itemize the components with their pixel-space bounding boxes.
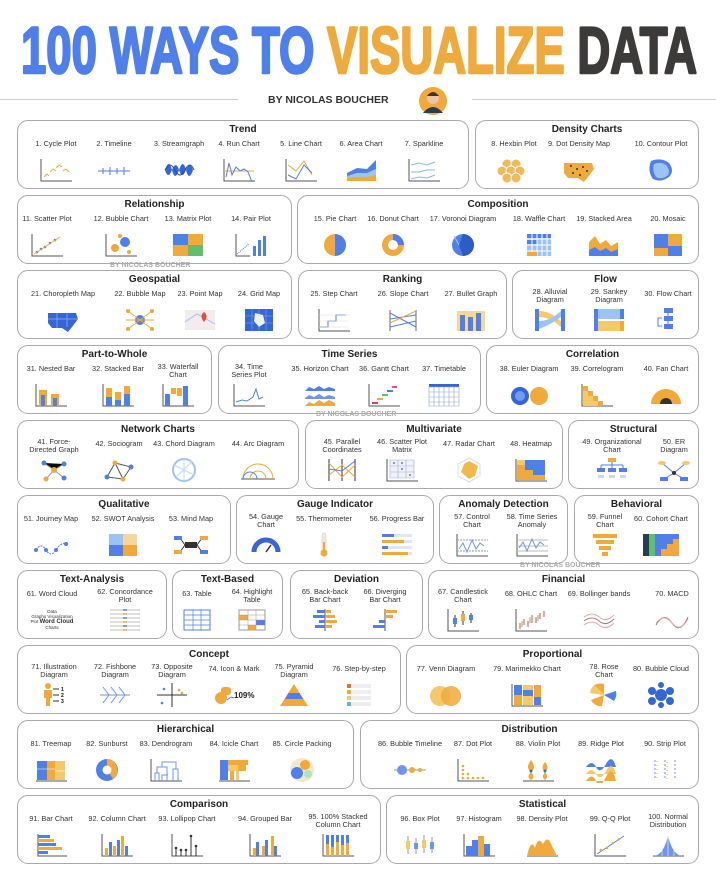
item: Normal Distribution: [631, 813, 705, 858]
item: Euler Diagram: 38. Euler Diagram: [500, 364, 558, 373]
panel: Multivariate: [305, 420, 563, 489]
panel: Statistical: [386, 795, 699, 864]
item: Line Chart: [280, 139, 322, 182]
item: Word Cloud: [15, 588, 89, 630]
item: Venn Diagram: [409, 663, 483, 708]
item: Dendrogram: 83. Dendrogram: [140, 739, 192, 748]
item: Lollipop Chart: 93. Lollipop Chart: [158, 814, 216, 823]
item: Control Chart: Chart: [463, 520, 481, 529]
heading: Distribution: Distribution: [501, 724, 558, 735]
panel: Geospatial: [17, 270, 292, 339]
item: Concordance Plot: 62. Concordance: [97, 587, 153, 596]
item: Parallel Coordinates: [305, 438, 379, 483]
item: Timetable: [422, 364, 466, 406]
panel: Structural: [568, 420, 699, 489]
item: Line Chart: 5. Line Chart: [280, 139, 322, 148]
heading: Text-Based: Text-Based: [201, 574, 254, 585]
item: Voronoi Diagram: 17. Voronoi Diagram: [430, 214, 496, 223]
item: Point Map: 23. Point Map: [177, 289, 223, 298]
item: Time Series Anomaly: [495, 513, 569, 558]
item: Point Map: [177, 289, 223, 330]
panel: Anomaly Detection: [439, 495, 568, 564]
item: Bubble Timeline: 86. Bubble Timeline: [378, 739, 442, 748]
item: Alluvial Diagram: Diagram: [536, 295, 564, 304]
item: Chord Diagram: [147, 438, 221, 483]
item: Gauge Chart: Chart: [257, 520, 275, 529]
item: Sankey Diagram: [591, 287, 628, 331]
item: Grid Map: [238, 289, 280, 331]
item: Choropleth Map: [31, 289, 95, 332]
item: Step Chart: 25. Step Chart: [310, 289, 358, 298]
item: SWOT Analysis: [86, 513, 160, 558]
item: Grouped Bar: [228, 813, 302, 858]
item: Venn Diagram: 77. Venn Diagram: [417, 664, 475, 673]
panel: Distribution: [360, 720, 699, 789]
item: OHLC Chart: 68. OHLC Chart: [505, 589, 557, 598]
item: Stacked Bar: [92, 364, 144, 406]
item: Candlestick Chart: 67. Candlestick: [438, 587, 488, 596]
item: Gantt Chart: 36. Gantt Chart: [359, 364, 409, 373]
item: Pie Chart: 15. Pie Chart: [314, 214, 356, 223]
panel: Concept: [17, 645, 401, 714]
heading: Proportional: Proportional: [523, 649, 582, 660]
panel: Part-to-Whole: [17, 345, 212, 414]
item: Lollipop Chart: [150, 813, 224, 858]
item: Circle Packing: [265, 738, 339, 783]
item: Dendrogram: [129, 738, 203, 783]
item: MACD: 70. MACD: [655, 589, 689, 598]
item: Histogram: [442, 813, 516, 858]
heading: Multivariate: Multivariate: [406, 424, 462, 435]
item: Pyramid Diagram: Diagram: [280, 670, 308, 679]
item: Timeline: 2. Timeline: [96, 139, 132, 148]
item: Q-Q Plot: [573, 813, 647, 858]
heading: Deviation: Deviation: [334, 574, 379, 585]
panel: Flow: [512, 270, 699, 339]
item: Waffle Chart: [513, 214, 566, 256]
panel: Behavioral: [574, 495, 699, 564]
panel: Proportional: [406, 645, 699, 714]
item: Back-back Bar Chart: 65. Back-back: [302, 587, 348, 596]
item: SWOT Analysis: 52. SWOT Analysis: [92, 514, 154, 523]
panel: Network Charts: [17, 420, 299, 489]
item: Voronoi Diagram: [430, 214, 496, 256]
item: Bubble Chart: 12. Bubble Chart: [94, 214, 148, 223]
item: Timetable: 37. Timetable: [422, 364, 466, 373]
heading: Comparison: Comparison: [170, 799, 228, 810]
watermark: BY NICOLAS BOUCHER: [110, 262, 190, 269]
heading: Ranking: Ranking: [383, 274, 422, 285]
item: Mind Map: [154, 513, 228, 558]
item: Sparkline: [405, 139, 443, 182]
item: Fishbone Diagram: [78, 663, 152, 708]
item: Sparkline: 7. Sparkline: [405, 139, 443, 148]
item: Waffle Chart: 18. Waffle Chart: [513, 214, 565, 223]
byline: [0, 87, 716, 115]
item: Concordance Plot: Plot: [119, 595, 131, 604]
item: Force-Directed Graph: [17, 438, 91, 483]
item: Flow Chart: 30. Flow Chart: [644, 289, 692, 298]
item: Icon & Mark: 74. Icon & Mark: [208, 664, 260, 673]
item: Opposite Diagram: [135, 663, 209, 708]
item: Organizational Chart: [575, 438, 649, 483]
item: Progress Bar: 56. Progress Bar: [370, 514, 424, 523]
item: Table: 63. Table: [182, 589, 212, 598]
item: Horizon Chart: 35. Horizon Chart: [291, 364, 349, 373]
item: Dot Plot: 87. Dot Plot: [454, 739, 492, 748]
item: Radar Chart: [432, 438, 506, 483]
item: Highlight Table: 64. Highlight: [232, 587, 272, 596]
item: Cycle Plot: [36, 139, 76, 182]
item: Mosaic: [650, 214, 686, 256]
item: Q-Q Plot: 99. Q-Q Plot: [590, 814, 630, 823]
item: Normal Distribution: Distribution: [650, 820, 686, 829]
item: Pair Plot: [231, 214, 271, 256]
item: Funnel Chart: [568, 513, 642, 558]
item: Mosaic: 20. Mosaic: [650, 214, 686, 223]
item: Bollinger bands: 69. Bollinger bands: [568, 589, 630, 598]
item: Control Chart: 57. Control: [454, 512, 490, 521]
item: Pie Chart: [314, 214, 356, 256]
heading: Text-Analysis: Text-Analysis: [60, 574, 124, 585]
heading: Time Series: Time Series: [322, 349, 377, 360]
item: Fan Chart: [629, 363, 703, 408]
item: Box Plot: [383, 813, 457, 858]
item: Time Series Anomaly: 58. Time Series: [507, 512, 557, 521]
item: Time Series Plot: [231, 362, 267, 406]
panel: Ranking: [298, 270, 507, 339]
item: Column Chart: [80, 813, 154, 858]
item: Icicle Chart: 84. Icicle Chart: [210, 739, 258, 748]
heading: Composition: Composition: [467, 199, 529, 210]
item: Diverging Bar Chart: 66. Diverging: [364, 587, 406, 596]
item: Back-back Bar Chart: [288, 588, 362, 633]
item: Candlestick Chart: [426, 588, 500, 633]
item: Strip Plot: 90. Strip Plot: [644, 739, 686, 748]
item: Parallel Coordinates: 45. Parallel: [324, 437, 360, 446]
item: Run Chart: [218, 139, 260, 182]
item: Step-by-step: [322, 663, 396, 708]
item: Sankey Diagram: 29. Sankey: [591, 287, 627, 296]
item: Nested Bar: [26, 364, 76, 406]
heading: Concept: Concept: [189, 649, 229, 660]
item: Grouped Bar: 94. Grouped Bar: [238, 814, 292, 823]
item: Donut Chart: [367, 214, 419, 256]
item: Fishbone Diagram: 72. Fishbone: [94, 662, 136, 671]
item: Funnel Chart: Chart: [596, 520, 614, 529]
item: Thermometer: [287, 513, 361, 558]
item: Matrix Plot: 13. Matrix Plot: [165, 214, 211, 223]
heading: Structural: Structural: [610, 424, 657, 435]
item: Column Chart: 92. Column Chart: [88, 814, 146, 823]
panel: Hierarchical: [17, 720, 354, 789]
item: Stacked Area: [576, 214, 632, 256]
panel: Financial: [428, 570, 699, 639]
item: Violin Plot: 88. Violin Plot: [516, 739, 560, 748]
item: ER Diagram: Diagram: [660, 445, 688, 454]
item: Rose Chart: Chart: [595, 670, 613, 679]
item: Journey Map: 51. Journey Map: [24, 514, 78, 523]
item: Sunburst: 82. Sunburst: [86, 739, 128, 748]
item: Concordance Plot: [88, 588, 162, 633]
item: 100% Stacked Column Chart: Column Chart: [315, 820, 360, 829]
item: Pair Plot: 14. Pair Plot: [231, 214, 271, 223]
item: Contour Plot: 10. Contour Plot: [635, 139, 687, 148]
item: Word Cloud: Plot Word Cloud: [31, 619, 73, 625]
item: Time Series Plot: Series Plot: [231, 370, 267, 379]
panel: Deviation: [290, 570, 423, 639]
item: Illustration Diagram: 71. Illustration: [31, 662, 77, 671]
item: Word Cloud: Charts: [45, 625, 59, 630]
heading: Gauge Indicator: Gauge Indicator: [297, 499, 373, 510]
item: Illustration Diagram: 2: [61, 693, 64, 699]
item: Flow Chart: [644, 289, 692, 329]
item: Bubble Map: [114, 289, 166, 331]
item: Bubble Timeline: [373, 738, 447, 783]
item: Strip Plot: [628, 738, 702, 783]
item: MACD: [635, 588, 709, 633]
item: Organizational Chart: Chart: [603, 445, 621, 454]
item: Rose Chart: 78. Rose: [589, 662, 619, 671]
item: Circle Packing: 85. Circle Packing: [273, 739, 331, 748]
item: Mind Map: 53. Mind Map: [169, 514, 213, 523]
item: Opposite Diagram: Diagram: [158, 670, 186, 679]
heading: Anomaly Detection: Anomaly Detection: [458, 499, 549, 510]
item: Dot Density Map: 9. Dot Density Map: [548, 139, 610, 148]
item: Bullet Graph: 27. Bullet Graph: [445, 289, 497, 298]
item: Density Plot: 98. Density Plot: [516, 814, 568, 823]
heading: Statistical: Statistical: [519, 799, 566, 810]
panel: Density Charts: [475, 120, 699, 189]
item: Treemap: 81. Treemap: [31, 739, 71, 748]
item: Bollinger bands: [562, 588, 636, 633]
item: Icon & Mark: [197, 663, 271, 708]
item: Waterfall Chart: [158, 362, 198, 406]
watermark: BY NICOLAS BOUCHER: [520, 562, 600, 569]
heading: Flow: Flow: [594, 274, 617, 285]
item: Nested Bar: 31. Nested Bar: [27, 364, 75, 373]
item: Stacked Area: 19. Stacked Area: [576, 214, 632, 223]
item: Marimekko Chart: [490, 663, 564, 708]
item: Contour Plot: [635, 139, 688, 181]
heading: Behavioral: Behavioral: [611, 499, 662, 510]
item: Bubble Cloud: [624, 663, 698, 708]
item: Cohort Chart: 60. Cohort Chart: [634, 514, 688, 523]
item: Diverging Bar Chart: Bar Chart: [369, 595, 401, 604]
item: Illustration Diagram: Diagram: [40, 670, 68, 679]
item: Correlogram: 39. Correlogram: [571, 364, 623, 373]
item: Fishbone Diagram: Diagram: [101, 670, 129, 679]
item: Scatter Plot Matrix: Matrix: [392, 445, 412, 454]
item: Highlight Table: Table: [243, 595, 261, 604]
item: 100% Stacked Column Chart: [301, 813, 375, 858]
item: Alluvial Diagram: [532, 287, 567, 331]
item: Waterfall Chart: 33. Waterfall: [158, 362, 198, 371]
item: Bar Chart: [14, 813, 88, 858]
item: Arc Diagram: 44. Arc Diagram: [232, 439, 284, 448]
item: Donut Chart: 16. Donut Chart: [367, 214, 419, 223]
item: Hexbin Plot: [491, 139, 537, 182]
item: Dot Density Map: [548, 139, 610, 182]
item: Icicle Chart: [197, 738, 271, 783]
item: Gauge Chart: 54. Gauge: [249, 512, 283, 521]
item: Pyramid Diagram: [257, 663, 331, 708]
item: Cohort Chart: [624, 513, 698, 558]
item: Scatter Plot: 11. Scatter Plot: [22, 214, 72, 223]
item: Scatter Plot: [22, 214, 72, 256]
item: Euler Diagram: [500, 364, 558, 405]
item: Bar Chart: 91. Bar Chart: [29, 814, 73, 823]
item: Area Chart: 6. Area Chart: [340, 139, 382, 148]
item: Step Chart: [310, 289, 358, 332]
item: Funnel Chart: 59. Funnel: [588, 512, 622, 521]
item: Organizational Chart: 49. Organizational: [582, 437, 642, 446]
item: Sociogram: 42. Sociogram: [95, 439, 143, 448]
item: Control Chart: [435, 513, 509, 558]
heading: Geospatial: Geospatial: [129, 274, 180, 285]
item: Thermometer: 55. Thermometer: [296, 514, 352, 523]
item: Ridge Plot: 89. Ridge Plot: [578, 739, 624, 748]
item: Bubble Cloud: 80. Bubble Cloud: [633, 664, 689, 673]
heading: Financial: Financial: [542, 574, 585, 585]
item: Hexbin Plot: 8. Hexbin Plot: [491, 139, 537, 148]
byline: BY NICOLAS BOUCHER: [268, 94, 389, 106]
item: Heatmap: [494, 438, 568, 483]
item: Highlight Table: [215, 588, 289, 633]
item: 100% Stacked Column Chart: 95. 100% Stacked: [308, 812, 368, 821]
heading: Correlation: Correlation: [566, 349, 619, 360]
panel: Comparison: [17, 795, 381, 864]
item: Arc Diagram: [221, 438, 295, 483]
item: Stacked Bar: 32. Stacked Bar: [92, 364, 144, 373]
item: Illustration Diagram: 1: [61, 687, 64, 693]
item: Streamgraph: [154, 139, 204, 176]
item: Gantt Chart: [359, 364, 409, 406]
item: Word Cloud: Graphs Visualization: [31, 614, 73, 619]
item: Choropleth Map: 21. Choropleth Map: [31, 289, 95, 298]
item: Fan Chart: 40. Fan Chart: [644, 364, 688, 373]
item: Table: [160, 588, 234, 633]
panel: Composition: [297, 195, 699, 264]
item: Illustration Diagram: 3: [61, 699, 64, 705]
heading: Relationship: Relationship: [124, 199, 184, 210]
heading: Hierarchical: Hierarchical: [157, 724, 214, 735]
item: Violin Plot: [501, 738, 575, 783]
item: Radar Chart: 47. Radar Chart: [443, 439, 495, 448]
item: Bubble Chart: [94, 214, 148, 256]
item: Alluvial Diagram: 28. Alluvial: [533, 287, 567, 296]
item: Slope Chart: 26. Slope Chart: [378, 289, 428, 298]
item: Force-Directed Graph: 41. Force-: [37, 437, 71, 446]
panel: Correlation: [486, 345, 699, 414]
panel: Gauge Indicator: [236, 495, 434, 564]
item: Treemap: [14, 738, 88, 783]
item: Opposite Diagram: 73. Opposite: [151, 662, 193, 671]
item: Matrix Plot: [165, 214, 212, 256]
panel: Text-Based: [172, 570, 283, 639]
item: Word Cloud: Data: [47, 609, 57, 614]
item: Histogram: 97. Histogram: [456, 814, 502, 823]
item: Bubble Map: 22. Bubble Map: [114, 289, 166, 298]
item: Gauge Chart: [229, 513, 303, 558]
item: Ridge Plot: [564, 738, 638, 783]
item: Sankey Diagram: Diagram: [595, 295, 623, 304]
item: Scatter Plot Matrix: [365, 438, 439, 483]
item: Diverging Bar Chart: [348, 588, 422, 633]
item: ER Diagram: [637, 438, 711, 483]
item: Parallel Coordinates: Coordinates: [322, 445, 362, 454]
item: Slope Chart: [378, 289, 428, 331]
panel: Trend: [17, 120, 469, 189]
item: Area Chart: [340, 139, 382, 181]
panel: Text-Analysis: [17, 570, 167, 639]
item: Run Chart: 4. Run Chart: [218, 139, 260, 148]
heading: Trend: Trend: [229, 124, 257, 135]
item: Streamgraph: 3. Streamgraph: [154, 139, 204, 148]
item: Rose Chart: [567, 663, 641, 708]
item: Dot Plot: [436, 738, 510, 783]
item: OHLC Chart: [494, 588, 568, 633]
item: ER Diagram: 50. ER: [663, 437, 685, 446]
item: Timeline: [96, 139, 132, 175]
item: Bullet Graph: [445, 289, 497, 331]
item: Marimekko Chart: 79. Marimekko Chart: [493, 664, 561, 673]
item: Sociogram: [82, 438, 156, 483]
heading: Density Charts: Density Charts: [552, 124, 622, 135]
item: Chord Diagram: 43. Chord Diagram: [153, 439, 215, 448]
heading: Part-to-Whole: Part-to-Whole: [82, 349, 147, 360]
item: Illustration Diagram: [17, 663, 91, 708]
item: Pyramid Diagram: 75. Pyramid: [275, 662, 313, 671]
panel: Relationship: [17, 195, 292, 264]
item: Icon & Mark: 109%: [234, 691, 254, 700]
panel: Qualitative: [17, 495, 231, 564]
heading: Network Charts: Network Charts: [121, 424, 195, 435]
item: Candlestick Chart: Chart: [454, 595, 472, 604]
panel: Time Series: [218, 345, 481, 414]
item: Step-by-step: 76. Step-by-step: [332, 664, 386, 673]
item: Scatter Plot Matrix: 46. Scatter Plot: [377, 437, 427, 446]
item: Word Cloud: 61. Word Cloud: [27, 589, 77, 598]
item: Back-back Bar Chart: Bar Chart: [309, 595, 341, 604]
item: Time Series Anomaly: Anomaly: [518, 520, 546, 529]
item: Normal Distribution: 100. Normal: [648, 812, 688, 821]
item: Waterfall Chart: Chart: [169, 370, 187, 379]
item: Sunburst: [70, 738, 144, 783]
item: Progress Bar: [360, 513, 434, 558]
item: Box Plot: 96. Box Plot: [400, 814, 440, 823]
item: Density Plot: [505, 813, 579, 858]
item: Horizon Chart: [291, 364, 349, 406]
item: Force-Directed Graph: Directed Graph: [29, 445, 79, 454]
item: Grid Map: 24. Grid Map: [238, 289, 280, 298]
item: Correlogram: [560, 363, 634, 408]
item: Cycle Plot: 1. Cycle Plot: [36, 139, 76, 148]
item: Heatmap: 48. Heatmap: [510, 439, 552, 448]
item: Time Series Plot: 34. Time: [235, 362, 263, 371]
heading: Qualitative: Qualitative: [98, 499, 150, 510]
item: Journey Map: [14, 513, 88, 558]
watermark: BY NICOLAS BOUCHER: [316, 411, 396, 418]
